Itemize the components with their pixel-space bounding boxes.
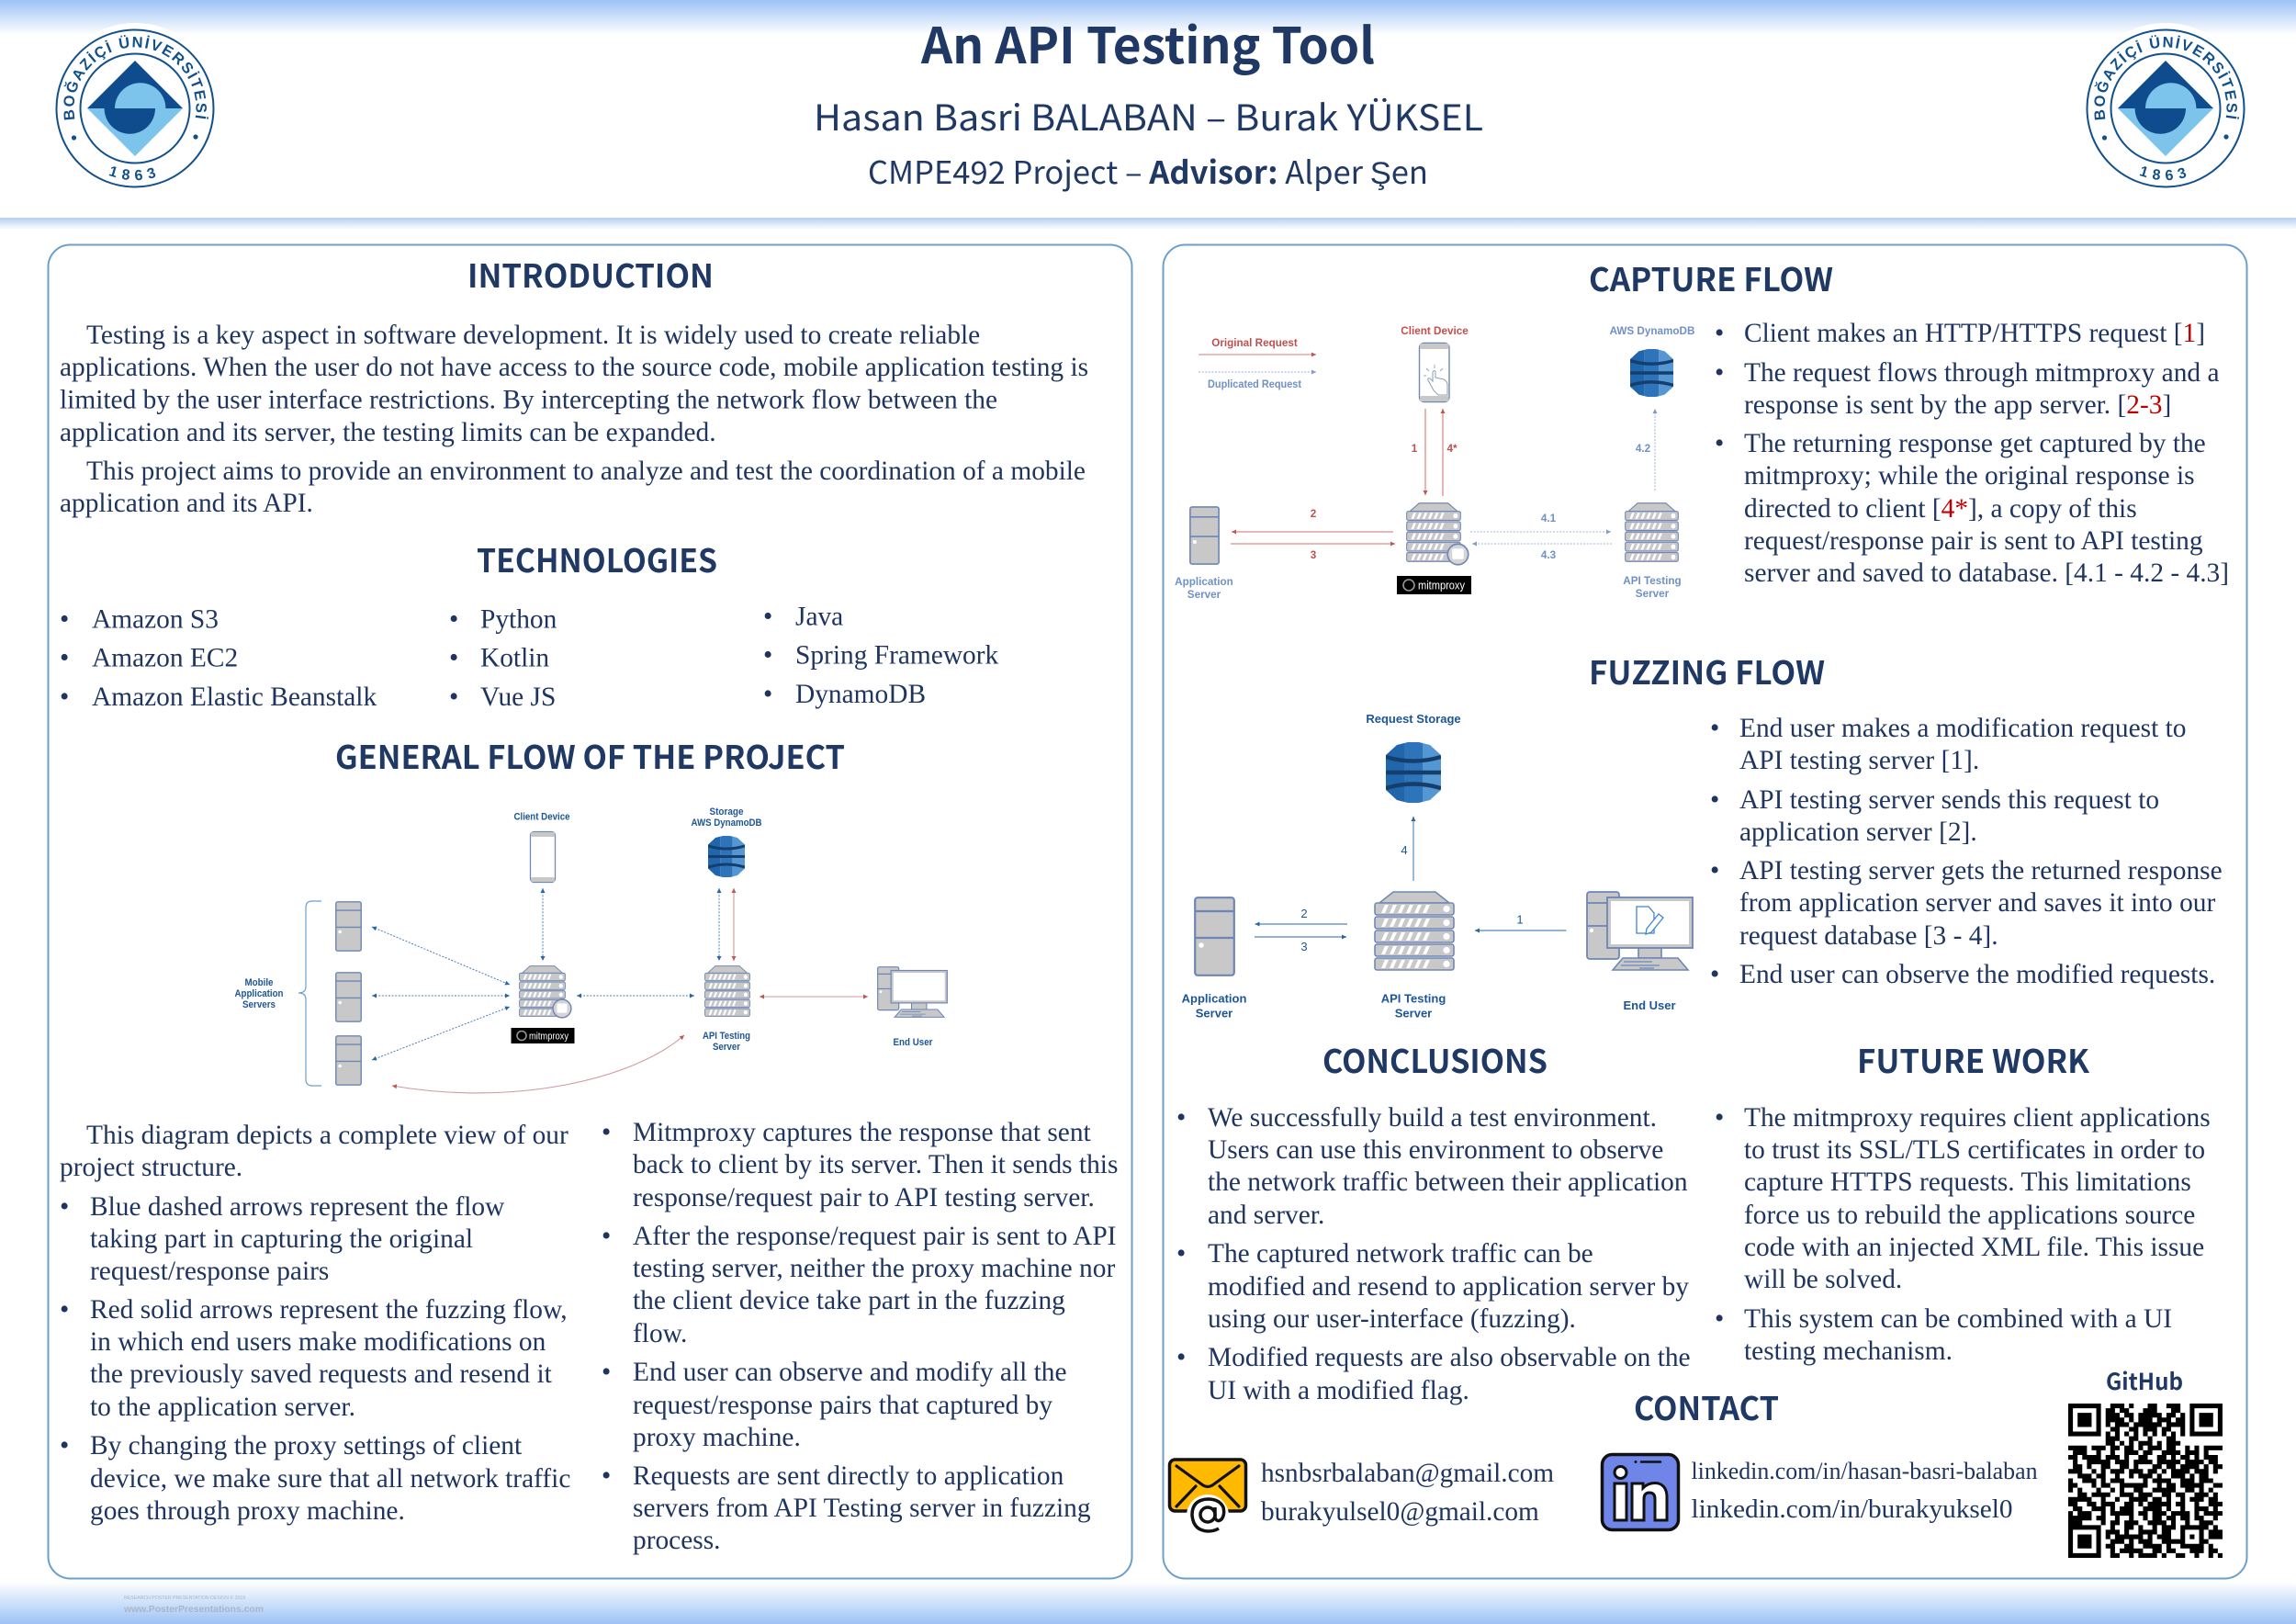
list: conclusions: • xyxy=(1176,1239,1186,1269)
authors: Hasan Basri BALABAN – Burak YÜKSEL xyxy=(814,90,1483,141)
label: application server: Application xyxy=(1182,992,1246,1005)
diagram: fuzzing flow xyxy=(1182,712,1693,1020)
watermark xyxy=(123,1595,264,1615)
text: linkedin profiles: linkedin.com/in/hasan-basri-balaban xyxy=(1692,1458,2037,1484)
text block: diagram description: goes through proxy machine. xyxy=(90,1496,405,1526)
advisor line: CMPE492 Project – Advisor: Alper Şen xyxy=(868,148,1428,193)
label: application server xyxy=(1175,576,1233,601)
list: future work: to trust its SSL/TLS certificates in order to xyxy=(1744,1135,2205,1165)
text block: introduction xyxy=(60,321,1088,518)
icon: mitmproxy server xyxy=(1407,503,1460,561)
list: capture flow: request/response pair is sent to API testing xyxy=(1744,526,2203,556)
list: conclusions: using our user-interface (fuzzing). xyxy=(1208,1304,1576,1334)
text block: diagram description: project structure. xyxy=(60,1153,242,1182)
icon: end user computer xyxy=(878,967,947,1017)
text block: mitmproxy notes: servers from API Testing server in fuzzing xyxy=(633,1494,1091,1523)
text block: diagram description: device, we make sure that all network traffic xyxy=(90,1464,570,1494)
text block: introduction: This project aims to provide an environment to analyze and test the coordination of a mobile xyxy=(86,457,1086,486)
text block: mitmproxy notes: flow. xyxy=(633,1319,687,1348)
heading: conclusions: CONCLUSIONS xyxy=(1322,1036,1548,1083)
list: conclusions: modified and resend to application server by xyxy=(1208,1272,1689,1302)
list: technologies column 3: • xyxy=(763,603,772,632)
list: capture flow xyxy=(1715,319,2229,588)
step numbers xyxy=(1311,443,1651,561)
list: fuzzing flow: request database [3 - 4]. xyxy=(1739,921,1998,951)
list: capture flow: mitmproxy; while the original response is xyxy=(1744,461,2195,491)
logo: Boğaziçi University left xyxy=(55,23,215,187)
top gradient band xyxy=(0,0,2296,35)
text: linkedin profiles xyxy=(1692,1458,2037,1524)
label: client device: Client Device xyxy=(1401,325,1469,337)
arrows: fuzzing xyxy=(1255,817,1567,937)
heading: technologies: TECHNOLOGIES xyxy=(477,536,717,582)
text block: mitmproxy notes: the client device take part in the fuzzing xyxy=(633,1286,1065,1315)
logo: Boğaziçi University left: BOĞAZİÇİ ÜNİVERSİTESİ xyxy=(63,35,209,119)
label: github: GitHub xyxy=(2106,1364,2183,1397)
list: capture flow: directed to client [4*], a copy of this xyxy=(1744,494,2137,524)
label: mobile application servers xyxy=(235,977,284,1010)
list: technologies column 1: • xyxy=(60,643,69,672)
text block: mitmproxy notes: • xyxy=(602,1222,611,1251)
diagram: capture flow xyxy=(1175,325,1694,601)
text block: introduction: application and its server, the testing limits can be expanded. xyxy=(60,418,716,447)
label: storage: AWS DynamoDB xyxy=(691,818,762,829)
icon: application server xyxy=(1195,897,1234,976)
icon: phone xyxy=(531,832,555,882)
step numbers: 4.3 xyxy=(1541,549,1557,561)
list: fuzzing flow: • xyxy=(1710,785,1719,815)
icon: document edit xyxy=(1637,907,1663,934)
list: fuzzing flow: API testing server sends this request to xyxy=(1739,785,2159,815)
text block: diagram description: taking part in capturing the original xyxy=(90,1224,473,1254)
icon: proxy lens xyxy=(1447,544,1469,565)
text: email addresses: hsnbsrbalaban@gmail.com xyxy=(1261,1459,1554,1488)
label: api testing server: Server xyxy=(713,1042,741,1053)
text block: diagram description: request/response pairs xyxy=(90,1257,329,1286)
list: future work: will be solved. xyxy=(1744,1265,1902,1294)
label: api testing server xyxy=(1381,992,1446,1020)
step numbers: 1 xyxy=(1412,443,1418,455)
step numbers: 1 xyxy=(1516,913,1524,926)
label: request storage: Request Storage xyxy=(1366,712,1461,726)
list: future work: force us to rebuild the applications source xyxy=(1744,1201,2195,1230)
list: future work: This system can be combined with a UI xyxy=(1744,1304,2172,1334)
text block: diagram description xyxy=(60,1121,570,1526)
label: application server: Application xyxy=(1175,576,1233,588)
icon: mitmproxy server xyxy=(520,966,565,1016)
list: technologies column 3: • xyxy=(763,641,772,671)
list: future work: • xyxy=(1715,1103,1724,1133)
label: api testing server: Server xyxy=(1636,588,1670,600)
list: fuzzing flow: End user can observe the modified requests. xyxy=(1739,960,2215,989)
label: api testing server xyxy=(703,1031,750,1053)
list: technologies column 3: Java xyxy=(795,603,843,632)
list: technologies column 1: Amazon Elastic Beanstalk xyxy=(92,682,377,712)
list: technologies column 2: Python xyxy=(480,604,557,634)
step numbers xyxy=(1300,843,1524,953)
heading: future work: FUTURE WORK xyxy=(1857,1036,2090,1083)
list: future work: code with an injected XML file. This issue xyxy=(1744,1233,2204,1262)
list: fuzzing flow: from application server and saves it into our xyxy=(1739,888,2215,918)
step numbers: 4* xyxy=(1446,443,1458,455)
label: client device: Client Device xyxy=(514,812,569,823)
list: conclusions: Modified requests are also observable on the xyxy=(1208,1343,1691,1372)
diagram: general flow xyxy=(235,806,947,1093)
text block: mitmproxy notes: testing server, neither the proxy machine nor xyxy=(633,1254,1115,1283)
arrows: dashed blue flow xyxy=(372,888,719,1060)
arrows: red fuzzing flow xyxy=(392,888,868,1093)
step numbers: 3 xyxy=(1300,940,1308,953)
label: api testing server xyxy=(1623,575,1682,600)
logo: Boğaziçi University left: 1863 xyxy=(108,166,156,180)
text block: diagram description: • xyxy=(60,1431,69,1460)
label: storage xyxy=(691,806,762,829)
list: future work: capture HTTPS requests. This limitations xyxy=(1744,1167,2191,1197)
list: technologies column 2 xyxy=(449,604,557,712)
list: technologies column 1: Amazon S3 xyxy=(92,604,219,634)
text block: diagram description: By changing the proxy settings of client xyxy=(90,1431,522,1460)
heading: fuzzing flow: FUZZING FLOW xyxy=(1589,648,1825,694)
list: conclusions: The captured network traffic can be xyxy=(1208,1239,1593,1269)
title: An API Testing Tool xyxy=(920,6,1375,78)
step numbers: 2 xyxy=(1300,907,1308,920)
list: fuzzing flow: application server [2]. xyxy=(1739,818,1977,847)
header xyxy=(55,6,2245,193)
icon: api testing server xyxy=(1375,892,1454,970)
list: future work: The mitmproxy requires client applications xyxy=(1744,1103,2211,1133)
label: application server: Server xyxy=(1196,1007,1232,1020)
legend: original and duplicated request xyxy=(1199,337,1316,390)
label: application server: Server xyxy=(1187,589,1221,601)
list: fuzzing flow: End user makes a modification request to xyxy=(1739,714,2186,743)
watermark: RESEARCH POSTER PRESENTATION DESIGN © 2019 xyxy=(124,1595,245,1601)
list: capture flow: • xyxy=(1715,358,1724,388)
legend: original and duplicated request: Duplicated Request xyxy=(1208,378,1301,390)
text block: mitmproxy notes: • xyxy=(602,1358,611,1387)
list: technologies column 1: • xyxy=(60,682,69,712)
text block: diagram description: to the application server. xyxy=(90,1393,355,1422)
header divider band xyxy=(0,218,2296,229)
label: application server xyxy=(1182,992,1246,1020)
arrows: capture red xyxy=(1231,409,1443,544)
icon: proxy lens xyxy=(553,999,571,1018)
logo: Boğaziçi University right: 1863 xyxy=(2140,166,2186,180)
list: capture flow: The request flows through mitmproxy and a xyxy=(1744,358,2219,388)
list: technologies column 2: • xyxy=(449,643,458,672)
legend: original and duplicated request: Original Request xyxy=(1211,337,1298,349)
list: conclusions: the network traffic between their application xyxy=(1208,1167,1688,1197)
list: capture flow: Client makes an HTTP/HTTPS request [1] xyxy=(1744,319,2205,348)
label: mobile application servers: Mobile xyxy=(244,977,274,988)
step numbers: 3 xyxy=(1311,549,1317,561)
list: technologies column 1: Amazon EC2 xyxy=(92,643,238,672)
label: api testing server: API Testing xyxy=(703,1031,750,1042)
list: fuzzing flow: • xyxy=(1710,714,1719,743)
text block: mitmproxy notes: response/request pair to API testing server. xyxy=(633,1183,1095,1212)
list: conclusions: Users can use this environment to observe xyxy=(1208,1135,1663,1165)
list: fuzzing flow: API testing server [1]. xyxy=(1739,746,1979,775)
icon: dynamodb xyxy=(1630,349,1673,397)
icon: dynamodb xyxy=(708,836,745,877)
label: api testing server: Server xyxy=(1395,1007,1432,1020)
text block: diagram description: in which end users make modifications on xyxy=(90,1327,546,1357)
list: conclusions: • xyxy=(1176,1103,1186,1133)
text block: mitmproxy notes: back to client by its server. Then it sends this xyxy=(633,1150,1118,1179)
label: aws dynamodb: AWS DynamoDB xyxy=(1610,325,1694,337)
list: technologies column 3: Spring Framework xyxy=(795,641,999,671)
text: linkedin profiles: linkedin.com/in/burakyuksel0 xyxy=(1692,1494,2013,1524)
bracket xyxy=(298,901,321,1086)
list: technologies column 1 xyxy=(60,604,377,712)
icon: api testing server xyxy=(705,966,749,1016)
text block: mitmproxy notes: • xyxy=(602,1118,611,1147)
icon: end user computer xyxy=(1587,892,1693,970)
list: capture flow: The returning response get captured by the xyxy=(1744,429,2206,458)
list: technologies column 3 xyxy=(763,603,999,709)
heading: introduction: INTRODUCTION xyxy=(467,251,714,298)
heading: general flow: GENERAL FLOW OF THE PROJECT xyxy=(335,732,845,779)
list: conclusions: UI with a modified flag. xyxy=(1208,1376,1469,1405)
text block: introduction: applications. When the user do not have access to the source code, mobile application testing is xyxy=(60,353,1088,382)
text block: mitmproxy notes: End user can observe and modify all the xyxy=(633,1358,1067,1387)
text block: diagram description: the previously saved requests and resend it xyxy=(90,1359,552,1389)
list: future work: • xyxy=(1715,1304,1724,1334)
label: mobile application servers: Application xyxy=(235,988,284,999)
text block: introduction: Testing is a key aspect in software development. It is widely used to create reliable xyxy=(86,321,980,350)
bottom gradient band xyxy=(0,1582,2296,1624)
text block: diagram description: This diagram depicts a complete view of our xyxy=(86,1121,568,1150)
step numbers: 4.2 xyxy=(1636,443,1651,455)
watermark: www.PosterPresentations.com xyxy=(123,1605,264,1615)
heading: contact: CONTACT xyxy=(1634,1383,1779,1430)
text: email addresses: burakyulsel0@gmail.com xyxy=(1261,1497,1539,1527)
label: mobile application servers: Servers xyxy=(242,999,276,1010)
icon: application server xyxy=(1190,507,1219,564)
badge: mitmproxy: mitmproxy xyxy=(529,1031,568,1042)
list: fuzzing flow: • xyxy=(1710,856,1719,885)
icons: mobile application servers xyxy=(336,902,361,1085)
text block: mitmproxy notes: • xyxy=(602,1461,611,1491)
label: end user: End User xyxy=(1623,998,1676,1012)
qr code xyxy=(2068,1406,2223,1555)
text block: diagram description: Red solid arrows represent the fuzzing flow, xyxy=(90,1295,568,1325)
list: fuzzing flow: API testing server gets the returned response xyxy=(1739,856,2223,885)
list: technologies column 2: • xyxy=(449,682,458,712)
text block: mitmproxy notes: process. xyxy=(633,1526,720,1555)
list: fuzzing flow xyxy=(1710,714,2223,989)
list: technologies column 2: Vue JS xyxy=(480,682,556,712)
text block: mitmproxy notes: After the response/request pair is sent to API xyxy=(633,1222,1116,1251)
list: capture flow: • xyxy=(1715,429,1724,458)
text block: diagram description: Blue dashed arrows represent the flow xyxy=(90,1192,505,1222)
arrows: capture blue xyxy=(1470,409,1655,544)
icon: dynamodb xyxy=(1386,742,1441,803)
list: future work xyxy=(1715,1103,2211,1366)
list: capture flow: response is sent by the app server. [2-3] xyxy=(1744,390,2171,420)
text block: introduction: limited by the user interface restrictions. By intercepting the network flow between the xyxy=(60,386,997,415)
logo: Boğaziçi University right xyxy=(2087,23,2245,187)
text block: mitmproxy notes: Mitmproxy captures the response that sent xyxy=(633,1118,1091,1147)
list: fuzzing flow: • xyxy=(1710,960,1719,989)
list: technologies column 3: DynamoDB xyxy=(795,680,926,709)
icon: email xyxy=(1170,1460,1245,1537)
label: end user: End User xyxy=(893,1037,933,1048)
text block: mitmproxy notes: request/response pairs that captured by xyxy=(633,1391,1052,1420)
list: technologies column 3: • xyxy=(763,680,772,709)
list: conclusions: We successfully build a test environment. xyxy=(1208,1103,1657,1133)
list: conclusions: • xyxy=(1176,1343,1186,1372)
badge: mitmproxy xyxy=(1397,576,1471,594)
list: technologies column 1: • xyxy=(60,604,69,634)
list: capture flow: • xyxy=(1715,319,1724,348)
badge: mitmproxy xyxy=(511,1028,575,1043)
panel: right xyxy=(1163,244,2246,1578)
text block: introduction: application and its API. xyxy=(60,489,313,518)
list: future work: testing mechanism. xyxy=(1744,1336,1953,1366)
list: technologies column 2: Kotlin xyxy=(480,643,549,672)
text: email addresses xyxy=(1261,1459,1554,1527)
badge: mitmproxy: mitmproxy xyxy=(1418,579,1465,592)
logo: Boğaziçi University right: BOĞAZİÇİ ÜNİVERSİTESİ xyxy=(2094,35,2239,119)
text block: diagram description: • xyxy=(60,1192,69,1222)
step numbers: 4 xyxy=(1401,843,1408,857)
text block: mitmproxy notes xyxy=(602,1118,1118,1555)
list: technologies column 2: • xyxy=(449,604,458,634)
step numbers: 4.1 xyxy=(1541,513,1557,524)
step numbers: 2 xyxy=(1311,508,1317,520)
list: conclusions: and server. xyxy=(1208,1201,1324,1230)
label: api testing server: API Testing xyxy=(1381,992,1446,1005)
heading: capture flow: CAPTURE FLOW xyxy=(1589,254,1833,301)
text block: mitmproxy notes: Requests are sent directly to application xyxy=(633,1461,1064,1491)
icon: phone with hand xyxy=(1420,344,1449,402)
text block: diagram description: • xyxy=(60,1295,69,1325)
list: capture flow: server and saved to database. [4.1 - 4.2 - 4.3] xyxy=(1744,558,2229,588)
label: storage: Storage xyxy=(709,806,744,818)
list: conclusions xyxy=(1176,1103,1691,1405)
panel: left xyxy=(48,244,1131,1578)
label: api testing server: API Testing xyxy=(1623,575,1682,587)
text block: mitmproxy notes: proxy machine. xyxy=(633,1423,801,1452)
icon: api testing server xyxy=(1626,503,1678,561)
icon: linkedin xyxy=(1602,1455,1679,1530)
